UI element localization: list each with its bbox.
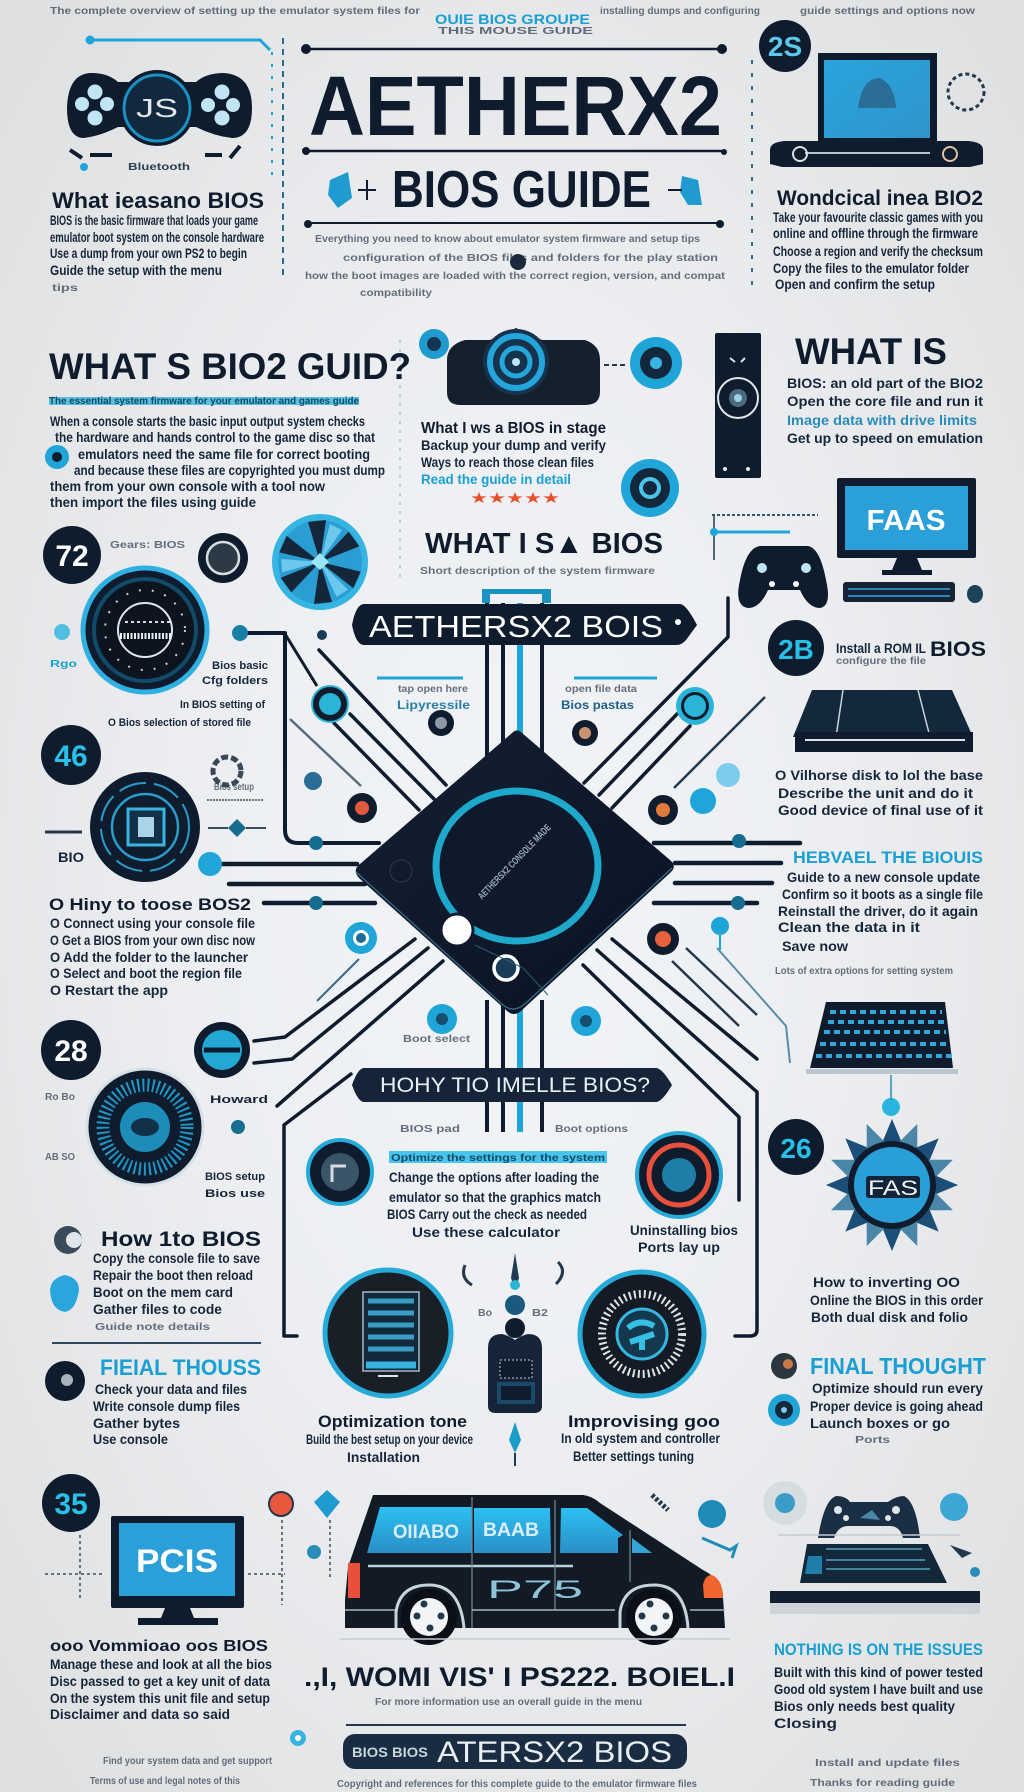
central console diamond: [356, 730, 674, 1014]
text block: how to bios left: Copy the console file to save: [93, 1250, 260, 1266]
top strip text: guide settings and options now: [800, 6, 975, 17]
icon: blue lens: [621, 459, 679, 517]
text block: left intro: then import the files using guide: [50, 494, 256, 510]
text block: under left monitor: Manage these and look at all the bios: [50, 1656, 272, 1672]
icon: title ornaments: [328, 172, 702, 208]
footer text: Thanks for reading guide: [810, 1778, 956, 1789]
center upper notes: [377, 678, 657, 712]
text block: bottom center: BIOS Carry out the check as needed: [387, 1206, 587, 1222]
text block: what is a BIOS: tips: [52, 283, 79, 294]
text block: what is a BIOS: BIOS is the basic firmware that loads your game: [50, 212, 258, 228]
icon: large disc left upper: [50, 568, 248, 692]
icon: center gadget: B2: [532, 1308, 549, 1319]
notes beside upper disc: Cfg folders: [202, 675, 268, 687]
text block: how to bios left: How 1to BIOS: [101, 1228, 261, 1251]
text block: right middle: Describe the unit and do it: [778, 785, 973, 801]
title subtext: [305, 234, 726, 299]
caption: under gear disc: Improvising goo: [568, 1412, 720, 1431]
notes beside upper disc: [108, 660, 268, 729]
banner: AetherSX2 BIOS: [352, 604, 697, 645]
center bottom section notes: Boot options: [555, 1124, 629, 1135]
top strip text: installing dumps and configuring: [600, 6, 760, 17]
badge 46: 46: [54, 740, 88, 773]
badge 28: 28: [54, 1035, 88, 1068]
text block: bottom right: Bios only needs best quality: [774, 1698, 955, 1714]
caption: under gear disc: In old system and controller: [561, 1430, 720, 1446]
title: AETHERX2: [309, 59, 722, 153]
text block: what is a BIOS: Guide the setup with the menu: [50, 262, 222, 278]
text block: bottom right: Built with this kind of power tested: [774, 1664, 983, 1680]
caption: under film disc: Build the best setup on your device: [306, 1431, 473, 1447]
number badge top right: 2S: [768, 31, 802, 62]
icon: keyboard: [806, 1002, 958, 1074]
banner: how to install bios: HOHY TIO IMELLE BIOS?: [380, 1074, 650, 1097]
icon: console with laptop bottom right: [763, 1481, 980, 1614]
text block: top right: Copy the files to the emulator folder: [773, 260, 969, 276]
icon: black van: BAAB: [483, 1520, 539, 1541]
text block: what is: Get up to speed on emulation: [787, 430, 983, 446]
caption: under film disc: [306, 1412, 473, 1465]
text block: center: Backup your dump and verify: [421, 437, 606, 453]
heading: what is PS2 BIOS: [304, 1662, 735, 1725]
top strip text: OUIE BIOS GROUPE: [435, 11, 590, 27]
captions beside radial disc: Ro Bo: [45, 1092, 75, 1103]
text block: what is: Open the core file and run it: [787, 393, 983, 409]
text block: final thought right: FINAL THOUGHT: [810, 1353, 986, 1379]
icon: gear disc: [580, 1272, 704, 1396]
heading: what is BIOS guide: [49, 346, 411, 407]
dotted column dividers: [283, 38, 752, 580]
icon: laptop top right: [770, 53, 984, 167]
icon: FAS badge: [826, 1075, 958, 1251]
text block: remove the bios: HEBVAEL THE BIOUIS: [793, 848, 983, 867]
text block: how to bios: O Get a BIOS from your own disc now: [50, 932, 255, 948]
text block: remove the bios: Confirm so it boots as a single file: [782, 886, 983, 902]
badge 72: 72: [55, 540, 89, 573]
title subtext: compatibility: [360, 288, 432, 299]
text block: final thought right: Optimize should run every: [812, 1380, 983, 1396]
text block: how to bios: O Select and boot the region file: [50, 965, 242, 981]
text block: final thought right: Proper device is going ahead: [810, 1398, 983, 1414]
badge 26: 26: [780, 1133, 812, 1164]
right device and caption: configure the file: [836, 656, 926, 667]
icon: large disc left upper: Rgo: [50, 659, 77, 670]
title: BIOS GUIDE: [392, 161, 651, 219]
text block: left intro: When a console starts the basic input output system checks: [50, 413, 365, 429]
text block: center: Read the guide in detail: [421, 471, 571, 487]
small dashes near monitor: [710, 515, 818, 560]
badge 26: [768, 1119, 824, 1175]
central console diamond: AETHERSX2 CONSOLE MADE: [476, 822, 554, 902]
icon: FAS badge: FAS: [868, 1177, 918, 1200]
icon: black van: [340, 1495, 730, 1645]
text block: top right: Wondcical inea BIO2: [777, 187, 983, 210]
heading: what is a BIOS: [420, 528, 663, 577]
icon: disc 223: Gears: BIOS: [110, 540, 185, 551]
text block: right middle: O Vilhorse disk to lol the base: [775, 767, 983, 783]
text block: final thoughts left: Gather bytes: [93, 1415, 180, 1431]
small icon and caption: BIO: [58, 849, 84, 865]
nodes on circuit: Boot select: [403, 1034, 471, 1045]
icon: black van: OIIABO: [393, 1522, 459, 1543]
heading: what is BIOS guide: WHAT S BIO2 GUID?: [49, 346, 411, 387]
icon: radial disc: [87, 1069, 245, 1185]
divider: [52, 1342, 261, 1344]
small icon and caption: Bios setup: [214, 782, 254, 793]
icon: disc 223: [110, 533, 248, 583]
text block: how to bios left: Boot on the mem card: [93, 1284, 233, 1300]
captions beside radial disc: BIOS setup: [205, 1171, 265, 1183]
dotted callout lines near monitor: [45, 1490, 340, 1605]
top strip text: [50, 6, 975, 37]
icon: center gadget: Bo: [478, 1308, 492, 1319]
icon: gamepad top left: [67, 70, 252, 173]
small icon and caption: [45, 757, 263, 865]
text block: under left monitor: ooo Vommioao oos BIOS: [50, 1638, 268, 1655]
text block: remove the bios: Lots of extra options for setting system: [775, 966, 953, 977]
text block: how to bios: O Add the folder to the launcher: [50, 949, 248, 965]
icon: disc with arrow: [308, 1140, 372, 1204]
text block: under left monitor: On the system this unit file and setup: [50, 1690, 270, 1706]
text block: bottom center: Uninstalling bios: [630, 1222, 738, 1238]
text block: remove the bios: Save now: [782, 938, 848, 954]
footer text: Copyright and references for this complete guide to the emulator firmware files: [337, 1779, 697, 1790]
title subtext: configuration of the BIOS files and folders for the play station: [343, 253, 718, 264]
text block: how to bios: O Hiny to toose BOS2: [49, 895, 251, 914]
text block: remove the bios: [775, 848, 983, 977]
icon: center device with rings: [419, 328, 682, 405]
text block: center: Ways to reach those clean files: [421, 454, 594, 470]
text block: what is: [787, 331, 983, 446]
text block: center: ★★★★★: [470, 490, 560, 507]
icon: slim console: [793, 690, 973, 752]
captions beside radial disc: [45, 1092, 268, 1200]
text block: final thought right: [768, 1353, 986, 1446]
text block: top right: [773, 187, 983, 292]
caption: under gear disc: Better settings tuning: [573, 1448, 694, 1464]
number badge top right: [759, 20, 811, 72]
text block: remove the bios: Clean the data in it: [778, 919, 920, 935]
text block: center: What I ws a BIOS in stage: [421, 420, 606, 437]
icon: monitor FAAS: [837, 478, 983, 603]
text block: how to bios left: [50, 1226, 261, 1333]
van side icons: [652, 1495, 736, 1558]
text block: final thoughts left: Use console: [93, 1431, 168, 1447]
text block: bottom right: Closing: [774, 1715, 837, 1731]
text block: bottom right: [774, 1640, 983, 1731]
center upper notes: open file data: [565, 684, 637, 695]
icon: gamepad top left: JS: [136, 93, 178, 123]
heading: what is a BIOS: Short description of the system firmware: [420, 566, 656, 577]
notes beside upper disc: Bios basic: [212, 660, 268, 672]
text block: left intro: them from your own console with a tool now: [50, 478, 325, 494]
text block: bottom center: emulator so that the graphics match: [389, 1189, 601, 1205]
heading: what is BIOS guide: The essential system firmware for your emulator and games guide: [49, 396, 359, 407]
icon: black van: P75: [487, 1576, 583, 1604]
text block: left intro: [45, 413, 385, 510]
icon: monitor PCIS: [111, 1516, 244, 1625]
icon: game controller: [738, 546, 828, 608]
text block: under left monitor: [50, 1638, 272, 1722]
text block: under FAS badge: Both dual disk and folio: [811, 1309, 968, 1325]
top strip text: The complete overview of setting up the emulator system files for: [50, 6, 420, 17]
right device and caption: Install a ROM IL: [836, 640, 926, 656]
text block: final thought right: Ports: [855, 1435, 891, 1446]
icon: chip disc: [90, 772, 266, 882]
icon: tower remote: [715, 333, 761, 478]
text block: bottom right: NOTHING IS ON THE ISSUES: [774, 1640, 983, 1659]
text block: top right: Open and confirm the setup: [775, 276, 935, 292]
text block: left intro: and because these files are copyrighted you must dump: [74, 462, 385, 478]
caption: under film disc: Optimization tone: [318, 1412, 467, 1431]
icon: monitor PCIS: PCIS: [136, 1543, 218, 1579]
footer text: Terms of use and legal notes of this: [90, 1776, 240, 1787]
right device and caption: 2B: [778, 634, 814, 665]
captions beside radial disc: Howard: [210, 1094, 268, 1106]
text block: under FAS badge: [810, 1274, 983, 1325]
text block: left intro: emulators need the same file for correct booting: [78, 446, 370, 462]
badge 46: [41, 725, 101, 785]
blue bracket line: [86, 36, 272, 180]
captions beside radial disc: Bios use: [205, 1188, 265, 1200]
notes beside upper disc: O Bios selection of stored file: [108, 717, 251, 729]
nodes on circuit: [304, 630, 746, 1045]
icon: gamepad top left: Bluetooth: [128, 162, 190, 173]
text block: final thoughts left: [45, 1355, 261, 1447]
heading: what is PS2 BIOS: .,I, WOMI VIS' I PS222. BOIEL.I: [304, 1662, 735, 1692]
right device and caption: BIOS: [930, 638, 986, 661]
icon: center gadget: [464, 1253, 563, 1466]
notes beside upper disc: In BIOS setting of: [180, 699, 265, 711]
text block: how to bios left: Gather files to code: [93, 1301, 222, 1317]
text block: bottom center: Ports lay up: [638, 1239, 720, 1255]
text block: remove the bios: Reinstall the driver, do it again: [778, 903, 978, 919]
heading: what is a BIOS: WHAT I S▲ BIOS: [425, 528, 663, 560]
badge 72: [43, 526, 101, 584]
text block: under FAS badge: Online the BIOS in this order: [810, 1292, 983, 1308]
center bottom section notes: [400, 1124, 629, 1135]
text block: bottom center: Change the options after loading the: [389, 1169, 599, 1185]
text block: what is: BIOS: an old part of the BIO2: [787, 375, 983, 391]
text block: how to bios left: Repair the boot then reload: [93, 1267, 253, 1283]
text block: final thoughts left: Write console dump files: [93, 1398, 240, 1414]
footer text: [90, 1756, 961, 1790]
title subtext: Everything you need to know about emulator system firmware and setup tips: [315, 234, 700, 245]
text block: bottom center: [387, 1151, 738, 1255]
text block: under left monitor: Disc passed to get a key unit of data: [50, 1673, 270, 1689]
text block: bottom right: Good old system I have built and use: [774, 1681, 983, 1697]
bottom banner: BIOS BIOS: [352, 1744, 428, 1760]
text block: how to bios: O Connect using your console file: [50, 915, 255, 931]
text block: how to bios left: Guide note details: [95, 1322, 211, 1333]
icon: film disc: [325, 1270, 451, 1396]
text block: what is a BIOS: What ieasano BIOS: [52, 188, 264, 213]
title: [301, 44, 727, 228]
icon: disc 222: [194, 1022, 250, 1078]
banner: AetherSX2 BIOS: AETHERSX2 BOIS: [369, 609, 663, 644]
text block: how to bios: O Restart the app: [50, 982, 168, 998]
icon: monitor FAAS: FAAS: [866, 505, 946, 537]
footer text: Install and update files: [815, 1758, 961, 1769]
text block: what is a BIOS: [50, 188, 264, 294]
text block: right middle: [775, 767, 983, 818]
caption: under gear disc: [561, 1412, 720, 1464]
text block: right middle: Good device of final use of it: [778, 802, 983, 818]
circuit lines: [219, 598, 800, 1336]
text block: what is: Image data with drive limits: [787, 412, 977, 428]
text block: final thoughts left: Check your data and files: [95, 1381, 247, 1397]
text block: what is a BIOS: Use a dump from your own PS2 to begin: [50, 245, 247, 261]
icon: fan: [272, 514, 368, 610]
text block: final thought right: Launch boxes or go: [810, 1415, 950, 1431]
caption: under film disc: Installation: [347, 1449, 420, 1465]
badge 35: 35: [54, 1488, 88, 1521]
text block: under FAS badge: How to inverting OO: [813, 1274, 960, 1290]
text block: remove the bios: Guide to a new console update: [787, 869, 980, 885]
text block: how to bios: [49, 895, 255, 998]
badge 28: [41, 1020, 101, 1080]
center upper notes: Bios pastas: [561, 698, 634, 712]
bottom banner: [290, 1730, 687, 1769]
text block: center: [421, 420, 606, 507]
text block: what is a BIOS: emulator boot system on the console hardware: [50, 229, 264, 245]
heading: what is PS2 BIOS: For more information use an overall guide in the menu: [375, 1697, 642, 1708]
text block: bottom center: Use these calculator: [412, 1224, 561, 1240]
title subtext: how the boot images are loaded with the correct region, version, and compat: [305, 271, 726, 282]
center upper notes: Lipyressile: [397, 698, 470, 712]
text block: left intro: the hardware and hands control to the game disc so that: [55, 429, 375, 445]
text block: under left monitor: Disclaimer and data so said: [50, 1706, 230, 1722]
right device and caption: [768, 620, 986, 676]
text block: final thoughts left: FIEIAL THOUSS: [100, 1355, 261, 1380]
center upper notes: tap open here: [398, 684, 468, 695]
icon: red ring disc: [637, 1133, 721, 1217]
vertical center bus: [482, 589, 551, 1132]
banner: how to install bios: [352, 1068, 672, 1102]
badge 35: [42, 1474, 100, 1532]
text block: what is: WHAT IS: [795, 331, 947, 372]
bottom banner: ATERSX2 BIOS: [437, 1736, 672, 1769]
captions beside radial disc: AB SO: [45, 1152, 75, 1163]
footer text: Find your system data and get support: [103, 1756, 273, 1767]
center bottom section notes: BIOS pad: [400, 1124, 460, 1135]
top strip text: THIS MOUSE GUIDE: [438, 26, 594, 37]
text block: bottom center: Optimize the settings for the system: [391, 1153, 605, 1164]
